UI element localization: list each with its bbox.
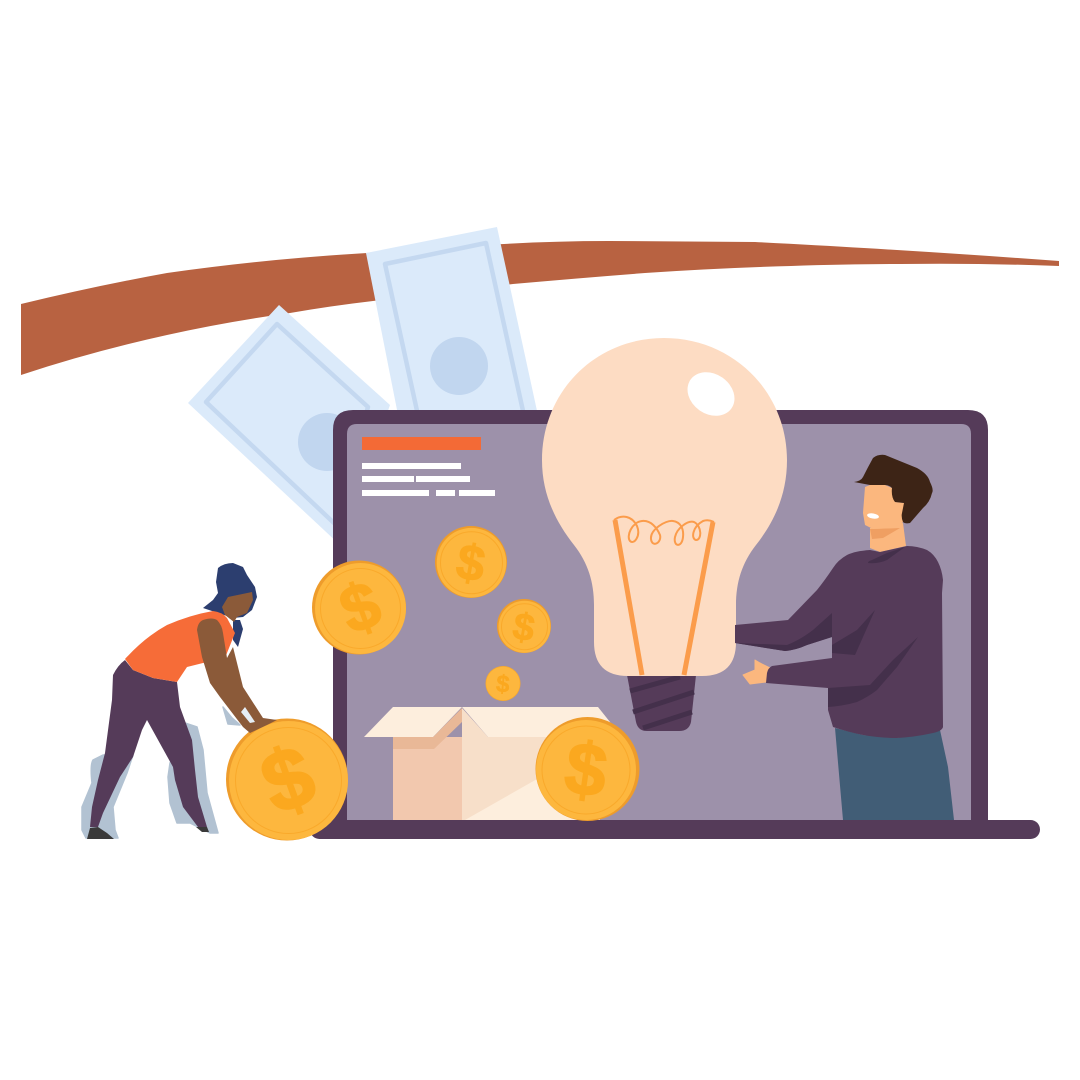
brown arc band bbox=[21, 241, 1059, 375]
icon: banknote right bbox=[366, 227, 539, 420]
icon: banknote left bbox=[188, 305, 390, 545]
bulb highlight bbox=[679, 363, 743, 425]
leggings bbox=[90, 660, 207, 827]
bulb glass bbox=[542, 338, 787, 676]
icon: open box bbox=[364, 707, 622, 820]
arms bbox=[197, 618, 277, 733]
coin: on box bbox=[536, 717, 640, 821]
coin: smallest: $ bbox=[495, 670, 511, 699]
bulb screw base bbox=[627, 675, 696, 731]
coin: upper middle: $ bbox=[452, 533, 490, 593]
laptop bbox=[310, 410, 1040, 839]
neck shadow bbox=[870, 528, 900, 539]
shadow behind woman bbox=[82, 707, 240, 838]
bulb screw thread shadows bbox=[630, 677, 694, 728]
mouth bbox=[867, 512, 879, 520]
coin: small bbox=[497, 599, 551, 653]
face bbox=[863, 485, 904, 529]
screen text bars bbox=[362, 437, 495, 496]
sweater shadows bbox=[735, 547, 918, 707]
coin: large foreground: $ bbox=[249, 727, 327, 833]
coin: smallest bbox=[486, 666, 520, 701]
coin: left: $ bbox=[330, 566, 390, 648]
coin: small: $ bbox=[510, 605, 538, 650]
bulb filament coil bbox=[614, 517, 714, 545]
shoes bbox=[87, 827, 209, 839]
sweater bbox=[735, 546, 943, 738]
coin: large foreground bbox=[226, 718, 348, 840]
man with arms outstretched bbox=[735, 455, 954, 820]
neck bbox=[870, 523, 906, 552]
woman pushing coin bbox=[87, 563, 277, 839]
light bulb bbox=[542, 338, 787, 731]
hand bbox=[743, 660, 770, 684]
coin: left bbox=[312, 560, 406, 654]
hair bbox=[203, 563, 257, 647]
face and neck bbox=[222, 592, 253, 622]
coin: on box: $ bbox=[560, 726, 612, 813]
trousers bbox=[835, 728, 954, 820]
bulb filament supports bbox=[615, 520, 713, 675]
orange top bbox=[125, 611, 235, 682]
hair bbox=[854, 455, 933, 523]
coin: upper middle bbox=[435, 526, 507, 598]
gap between arms bbox=[241, 707, 255, 723]
